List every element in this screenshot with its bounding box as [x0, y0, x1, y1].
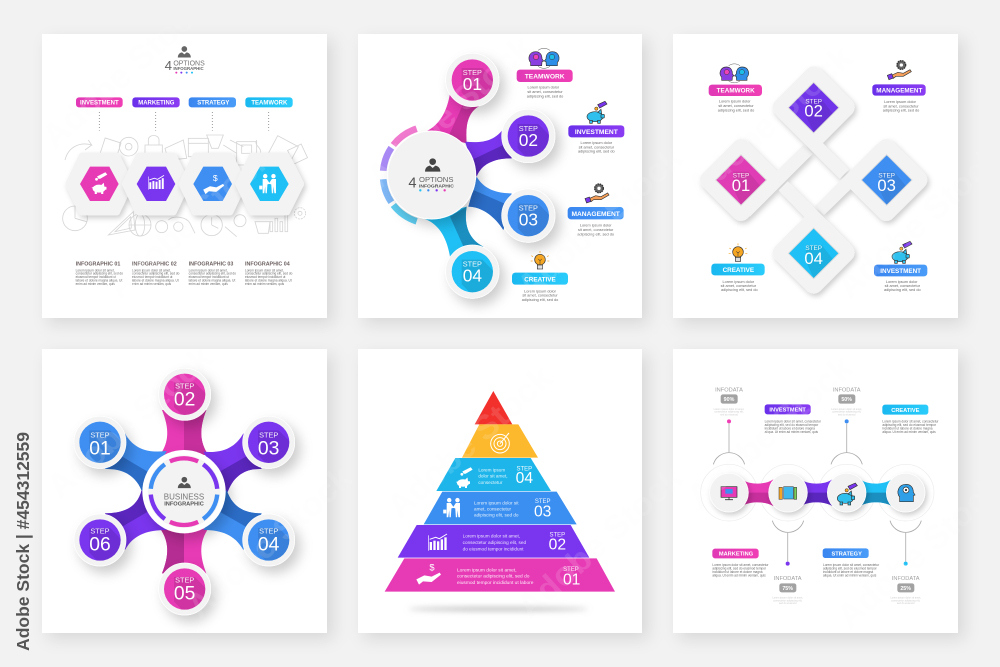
- tier step 4: consectetur: [478, 480, 503, 485]
- captions: consectetur adipiscing elit, sed do: [132, 272, 180, 276]
- step 4 diamond: [788, 227, 840, 279]
- title block: OPTIONS: [173, 60, 205, 67]
- captions: consectetur adipiscing elit, sed do: [76, 272, 123, 276]
- tier step 1: consectetur adipiscing elit, sed do: [457, 574, 530, 580]
- investment callout: adipiscing elit, sed do: [884, 288, 921, 292]
- data pin 25%: sed do eiusmod: [897, 602, 915, 605]
- step 2 circle: STEP: [175, 382, 194, 391]
- investment callout: [568, 101, 624, 154]
- captions: Lorem ipsum dolor sit amet,: [76, 268, 115, 272]
- step 1 circle: 01: [89, 438, 111, 459]
- investment label: aliqua. Ut enim ad minim veniam, quis: [765, 430, 818, 434]
- step 1 diamond: [715, 154, 767, 206]
- diamond 3 frame: [815, 135, 931, 225]
- category labels: TEAMWORK: [251, 101, 288, 107]
- diamond 4 frame: [769, 181, 858, 297]
- step 2 diamond: 02: [804, 102, 823, 121]
- stock id side text: Adobe Stock | #454312559: [13, 432, 33, 651]
- hexagon step 2: [125, 156, 187, 212]
- investment label: adipiscing elit, sed do eiusmod tempor: [765, 423, 818, 427]
- watermark: Adobe Stock: [100, 139, 280, 306]
- watermark: Adobe Stock: [360, 29, 540, 196]
- step 5 circle: [159, 563, 211, 616]
- step 2 circle: 02: [174, 389, 195, 410]
- creative callout: Lorem ipsum dolor: [524, 289, 557, 293]
- tier step 3: Lorem ipsum dolor sit: [474, 501, 519, 506]
- data pin 75%: sed do eiusmod: [779, 602, 797, 605]
- creative callout: adipiscing elit, sed do: [721, 288, 758, 292]
- outer arc segments: [383, 129, 417, 221]
- creative label: adipiscing elit, sed do eiusmod tempor: [882, 423, 936, 427]
- captions: labore et dolore magna aliqua. Ut: [245, 278, 292, 282]
- data pin 25%: consectetur adipiscing elit,: [891, 599, 921, 602]
- step 1 circle: [74, 416, 127, 469]
- step 6 circle: [74, 514, 127, 567]
- step 2 circle: [502, 109, 555, 163]
- tier step 3: amet, consectetur: [474, 507, 511, 512]
- step 2 diamond: [788, 82, 840, 134]
- investment callout: sit amet, consectetur: [885, 284, 921, 288]
- watermark: Adobe Stock: [510, 139, 690, 306]
- watermark: Adobe Stock: [680, 39, 860, 206]
- tier step 1: 01: [563, 571, 580, 588]
- center hub: 4: [408, 175, 416, 191]
- marketing label: adipiscing elit, sed do eiusmod tempor: [712, 566, 766, 570]
- diamond 2 frame: [769, 63, 858, 179]
- tier step 1: [385, 558, 615, 592]
- investment callout: INVESTMENT: [575, 129, 618, 136]
- step 3 circle: STEP: [519, 204, 538, 213]
- hexagon step 1: [69, 156, 130, 212]
- management callout: adipiscing elit, sed do: [883, 109, 919, 113]
- data pin 75%: INFODATA: [774, 576, 802, 582]
- creative callout: [711, 243, 765, 292]
- tier step 2: [398, 525, 589, 558]
- strategy label: incididunt ut labore et dolore magna: [823, 570, 873, 574]
- hexagon step 3: $: [213, 173, 218, 183]
- strategy label: adipiscing elit, sed do eiusmod tempor: [823, 566, 877, 570]
- management callout: sit amet, consectetur: [578, 228, 614, 232]
- captions: labore et dolore magna aliqua. Ut: [132, 278, 179, 282]
- data pin 90%: sed do eiusmod: [720, 413, 738, 416]
- connector arms: [423, 93, 512, 257]
- tier step 1: STEP: [563, 567, 579, 573]
- center hub: OPTIONS: [419, 175, 453, 184]
- data pin 25%: Lorem ipsum dolor sit amet,: [890, 597, 921, 600]
- creative callout: Lorem ipsum dolor: [722, 280, 755, 284]
- data pin 50%: [831, 388, 862, 464]
- watermark: Adobe Stock: [180, 459, 360, 626]
- title block: [165, 46, 205, 74]
- captions: labore et dolore magna aliqua. Ut: [76, 278, 122, 282]
- captions: [76, 262, 293, 286]
- data pin 75%: 75%: [782, 586, 793, 592]
- panel: horizontal timeline: [701, 388, 938, 605]
- tier step 4: STEP: [517, 466, 532, 472]
- creative callout: [512, 251, 568, 302]
- step 3 circle: 03: [258, 438, 279, 459]
- tier step 2: do eiusmod tempor incididunt: [463, 546, 524, 551]
- step 1 circle: [446, 53, 499, 107]
- tier step 4: [436, 458, 551, 491]
- captions: Lorem ipsum dolor sit amet,: [132, 268, 171, 272]
- teamwork callout: Lorem ipsum dolor: [527, 86, 560, 90]
- creative label: CREATIVE: [891, 408, 920, 414]
- step 2 diamond: STEP: [805, 98, 822, 105]
- data pin 90%: consectetur adipiscing elit,: [714, 411, 744, 414]
- connector bands: [742, 479, 892, 506]
- step 2 circle: STEP: [519, 124, 538, 133]
- panel: hexagon timeline: [63, 46, 308, 286]
- step 3 circle: STEP: [259, 431, 278, 440]
- title block: INFOGRAPHIC: [173, 66, 204, 71]
- marketing label: MARKETING: [719, 552, 754, 558]
- captions: INFOGRAPHIC 02: [132, 262, 177, 268]
- creative callout: adipiscing elit, sed do: [522, 298, 558, 302]
- marketing label: Lorem ipsum dolor sit amet, consectetur: [712, 563, 768, 567]
- category labels: [76, 97, 293, 107]
- tier step 2: 02: [549, 537, 566, 554]
- teamwork callout: TEAMWORK: [717, 88, 755, 95]
- data pin 50%: INFODATA: [833, 388, 861, 394]
- step 3 diamond: STEP: [878, 172, 895, 179]
- teamwork callout: TEAMWORK: [525, 74, 565, 81]
- captions: labore et dolore magna aliqua. Ut: [189, 278, 235, 282]
- captions: eiusmod tempor incididunt ut: [132, 275, 172, 279]
- node 3 piggy bank: [827, 473, 866, 512]
- panel: woven diamonds: [696, 61, 931, 297]
- captions: eiusmod tempor incididunt ut: [189, 275, 229, 279]
- tier yellow with target: [462, 424, 538, 458]
- step 1 diamond: 01: [732, 176, 750, 195]
- step 1 circle: 01: [463, 74, 482, 94]
- step 3 diamond: 03: [877, 176, 896, 195]
- captions: Lorem ipsum dolor sit amet,: [189, 268, 228, 272]
- teamwork callout: [517, 48, 573, 98]
- marketing label: incididunt ut labore et dolore magna: [712, 570, 763, 574]
- teamwork callout: adipiscing elit, sed do: [718, 108, 754, 112]
- creative callout: sit amet, consectetur: [522, 294, 558, 298]
- management callout: [872, 61, 926, 113]
- captions: enim ad minim veniam, quis: [132, 282, 172, 286]
- business doodle line art: [63, 135, 308, 237]
- step 1 circle: STEP: [463, 68, 482, 77]
- management callout: sit amet, consectetur: [883, 104, 919, 108]
- strategy label: STRATEGY: [831, 551, 862, 557]
- management callout: Lorem ipsum dolor: [580, 224, 612, 228]
- step 4 circle: [446, 245, 499, 298]
- tier step 1: $: [429, 562, 435, 572]
- investment callout: INVESTMENT: [880, 268, 921, 275]
- marketing label: [712, 549, 768, 578]
- central hub: BUSINESS: [164, 493, 204, 502]
- watermark: Adobe Stock: [680, 349, 860, 516]
- tier step 3: STEP: [535, 499, 550, 505]
- creative label: Lorem ipsum dolor sit amet, consectetur: [882, 420, 938, 424]
- investment callout: [874, 241, 927, 292]
- data pin 50%: consectetur adipiscing elit,: [832, 411, 862, 414]
- management callout: Lorem ipsum dolor: [884, 100, 917, 104]
- captions: eiusmod tempor incididunt ut: [76, 275, 116, 279]
- investment label: Lorem ipsum dolor sit amet, consectetur: [765, 420, 821, 424]
- step 1 diamond: STEP: [733, 172, 749, 179]
- tier step 2: STEP: [550, 533, 565, 539]
- step 4 diamond: 04: [804, 249, 823, 268]
- connector arms: [105, 410, 262, 573]
- teamwork callout: [709, 64, 762, 112]
- watermark: Adobe Stock: [40, 339, 220, 506]
- step 3 circle: [502, 189, 555, 242]
- data pin 50%: sed do eiusmod: [838, 413, 856, 416]
- captions: Lorem ipsum dolor sit amet,: [245, 268, 284, 272]
- data pin 75%: consectetur adipiscing elit,: [773, 599, 803, 602]
- tier step 1: Lorem ipsum dolor sit amet,: [457, 568, 517, 574]
- investment callout: sit amet, consectetur: [579, 145, 615, 149]
- teamwork callout: sit amet, consectetur: [718, 104, 754, 108]
- marketing label: aliqua. Ut enim ad minim veniam, quis: [712, 574, 766, 578]
- tier step 3: [424, 492, 577, 524]
- panel: four-step metaball: [383, 48, 624, 302]
- investment label: incididunt ut labore et dolore magna: [765, 426, 815, 430]
- strategy label: [823, 548, 879, 578]
- data pin 90%: 90%: [724, 397, 735, 403]
- category labels: INVESTMENT: [80, 101, 119, 107]
- creative label: aliqua. Ut enim ad minim veniam, quis: [882, 430, 936, 434]
- tier step 4: Lorem ipsum: [478, 468, 505, 473]
- step 3 circle: 03: [519, 210, 538, 230]
- captions: INFOGRAPHIC 01: [76, 262, 120, 268]
- ground shadow: [408, 607, 588, 611]
- node 4 head: [886, 473, 925, 512]
- creative callout: CREATIVE: [524, 276, 556, 283]
- teamwork callout: sit amet, consectetur: [527, 90, 563, 94]
- data pin 25%: [890, 521, 921, 605]
- captions: enim ad minim veniam, quis: [189, 282, 228, 286]
- tier step 3: adipiscing elit, sed do: [474, 513, 519, 518]
- data pin 90%: INFODATA: [715, 388, 743, 394]
- tier step 1: eiusmod tempor incididunt ut labore: [457, 580, 534, 586]
- hexagon step 3: [182, 156, 243, 212]
- investment label: INVESTMENT: [769, 408, 806, 414]
- data pin 90%: Lorem ipsum dolor sit amet,: [714, 408, 745, 411]
- step 4 circle: STEP: [259, 527, 278, 536]
- step 1 circle: STEP: [90, 431, 110, 440]
- step 4 diamond: STEP: [805, 245, 822, 252]
- captions: INFOGRAPHIC 04: [245, 262, 290, 268]
- captions: INFOGRAPHIC 03: [189, 262, 233, 268]
- creative callout: sit amet, consectetur: [721, 284, 757, 288]
- teamwork callout: Lorem ipsum dolor: [719, 100, 751, 104]
- tier step 4: dolor sit amet,: [478, 474, 508, 479]
- step 3 circle: [243, 416, 295, 469]
- teamwork callout: adipiscing elit, sed do: [527, 94, 563, 98]
- captions: consectetur adipiscing elit, sed do: [189, 272, 236, 276]
- step 6 circle: 06: [89, 534, 111, 555]
- tier red apex: [475, 391, 512, 424]
- watermark: Adobe Stock: [510, 459, 690, 626]
- watermark: Adobe Stock: [380, 359, 560, 526]
- strategy label: aliqua. Ut enim ad minim veniam, quis: [823, 574, 877, 578]
- diamond 1 frame: [696, 135, 812, 225]
- tier step 2: Lorem ipsum dolor sit amet,: [463, 534, 520, 539]
- center hub: [388, 131, 476, 219]
- step 2 circle: [159, 368, 211, 421]
- investment callout: adipiscing elit, sed do: [578, 150, 615, 154]
- central hub: [142, 450, 226, 533]
- captions: consectetur adipiscing elit, sed do: [245, 272, 293, 276]
- data pin 50%: Lorem ipsum dolor sit amet,: [831, 408, 862, 411]
- management callout: MANAGEMENT: [571, 211, 620, 218]
- data pin 75%: Lorem ipsum dolor sit amet,: [772, 597, 803, 600]
- investment callout: Lorem ipsum dolor: [886, 280, 918, 284]
- thin background rings: [701, 464, 934, 521]
- step 4 circle: [243, 514, 295, 567]
- data pin 75%: [772, 521, 804, 605]
- data pin 25%: INFODATA: [892, 576, 920, 582]
- investment callout: Lorem ipsum dolor: [580, 141, 613, 145]
- dotted connector lines: [99, 112, 269, 131]
- step 4 circle: 04: [258, 534, 280, 555]
- step 4 circle: 04: [463, 266, 482, 286]
- title block: 4: [165, 58, 173, 73]
- tier step 3: 03: [534, 503, 552, 520]
- data pin 25%: 25%: [900, 586, 911, 592]
- step 5 circle: 05: [174, 583, 195, 604]
- panel: pyramid: [385, 391, 615, 611]
- node 2 notes: [769, 473, 807, 512]
- step 6 circle: STEP: [90, 527, 110, 536]
- captions: eiusmod tempor incididunt ut: [245, 275, 285, 279]
- strategy label: Lorem ipsum dolor sit amet, consectetur: [823, 563, 879, 567]
- data pin 50%: 50%: [841, 397, 852, 403]
- step 5 circle: STEP: [175, 576, 194, 585]
- creative label: [882, 405, 938, 434]
- center hub: INFOGRAPHIC: [419, 184, 454, 190]
- creative callout: CREATIVE: [723, 267, 754, 274]
- panel: six-step hub: [74, 368, 295, 616]
- management callout: [568, 184, 624, 236]
- step 3 diamond: [861, 154, 913, 206]
- management callout: adipiscing elit, sed do: [577, 232, 614, 236]
- creative label: incididunt ut labore et dolore magna: [882, 426, 933, 430]
- category labels: MARKETING: [138, 101, 175, 107]
- captions: enim ad minim veniam, quis: [76, 282, 115, 286]
- central hub: INFOGRAPHIC: [164, 502, 204, 508]
- captions: enim ad minim veniam, quis: [245, 282, 285, 286]
- step 4 circle: STEP: [463, 260, 482, 269]
- hexagon step 4: [239, 156, 301, 212]
- tier step 2: consectetur adipiscing elit, sed: [463, 540, 526, 545]
- tier step 4: 04: [516, 470, 533, 487]
- step 2 circle: 02: [519, 130, 538, 150]
- management callout: MANAGEMENT: [876, 87, 922, 94]
- investment label: [765, 404, 821, 434]
- data pin 90%: [713, 388, 745, 464]
- node 1 monitor: [710, 473, 748, 512]
- category labels: STRATEGY: [197, 101, 229, 107]
